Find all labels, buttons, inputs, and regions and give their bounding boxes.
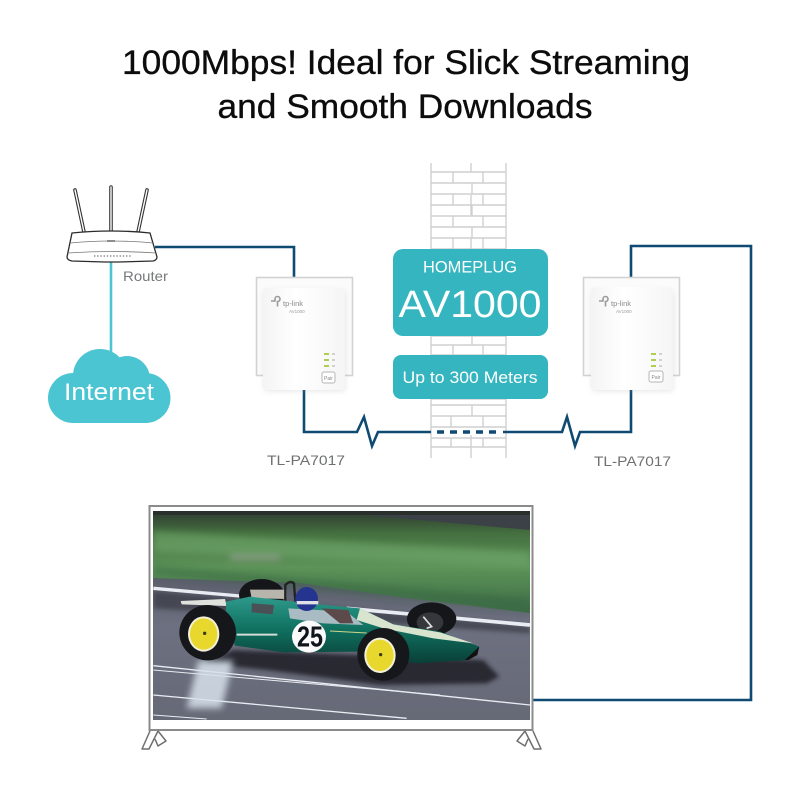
TV legs (142, 731, 541, 749)
router label: Router (123, 268, 168, 284)
far wheels (239, 579, 284, 600)
title: and Smooth Downloads (218, 88, 592, 126)
icon: router (67, 187, 157, 262)
far track dark band (153, 592, 530, 633)
right powerline adapter: Pair (652, 375, 661, 381)
badge: HomePlug AV1000: AV1000 (398, 284, 542, 326)
TV (142, 506, 541, 749)
wired line: right adapter to TV (533, 246, 751, 700)
right powerline adapter: tp-link (611, 299, 631, 308)
badge: range (393, 355, 548, 399)
road lines (153, 588, 530, 719)
left powerline adapter: AV1000 (289, 309, 305, 314)
badge: HomePlug AV1000 (393, 249, 548, 336)
shadow (203, 650, 499, 685)
race car photo on screen (153, 511, 530, 720)
model label right: TL-PA7017 (594, 453, 671, 469)
title: 1000Mbps! Ideal for Slick Streaming (122, 44, 690, 82)
engine and wing (181, 599, 227, 606)
badge: HomePlug AV1000: HOMEPLUG (423, 258, 517, 276)
blurred start streak (187, 661, 233, 708)
grass streaks (153, 532, 530, 612)
TV frame (150, 506, 532, 730)
driver helmet (295, 587, 318, 611)
title (122, 44, 690, 126)
powerline dashes through wall (437, 430, 500, 434)
car body (226, 597, 479, 663)
powerline connection right (503, 388, 631, 446)
right powerline adapter (584, 278, 680, 391)
front wheel (357, 628, 409, 681)
badge: range: Up to 300 Meters (402, 368, 538, 387)
rear wheel (179, 605, 236, 660)
left powerline adapter: Pair (324, 376, 333, 382)
model label left: TL-PA7017 (267, 452, 345, 468)
internet cloud: Internet (64, 379, 154, 406)
internet link (110, 262, 112, 352)
left powerline adapter: tp-link (283, 299, 303, 308)
wired line: router to left adapter (155, 247, 294, 278)
number roundel (292, 621, 326, 653)
right powerline adapter: AV1000 (616, 309, 632, 314)
internet cloud (48, 349, 170, 423)
left powerline adapter (256, 278, 352, 391)
race car photo on screen: 25 (297, 622, 323, 654)
powerline connection left (304, 388, 431, 446)
brick wall (431, 163, 506, 458)
